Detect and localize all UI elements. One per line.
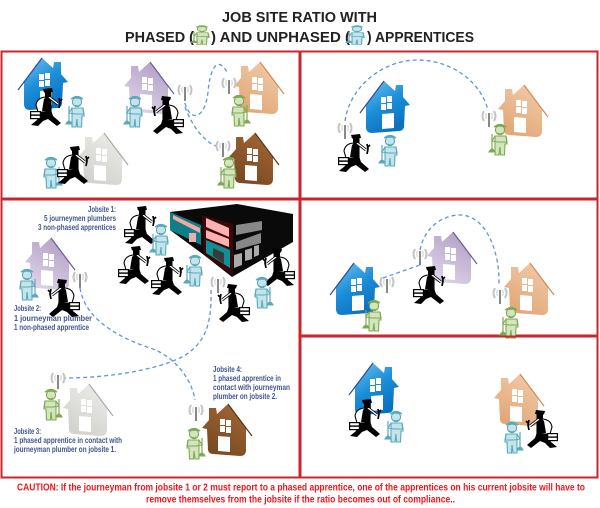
orange house [498, 85, 548, 137]
jobsite 4 label: Jobsite 4: [213, 365, 242, 374]
blue house with journeyman and apprentice [18, 58, 84, 127]
title: JOB SITE RATIO WITH [222, 10, 377, 26]
wireless links [380, 215, 506, 304]
title: PHASED ( [125, 30, 194, 46]
title: ) AND UNPHASED ( [211, 30, 350, 46]
jobsite 2 house and workers [20, 238, 79, 317]
panel: bottom right scenario [300, 336, 598, 478]
wireless links [178, 64, 236, 157]
blue house with journeyman and apprentice [349, 363, 403, 442]
orange house with journeyman and apprentice [494, 374, 557, 453]
wireless link [338, 60, 496, 139]
jobsite 4 label: 1 phased apprentice in [213, 374, 281, 383]
gray house with journeyman and apprentice [44, 133, 128, 188]
title [125, 10, 474, 46]
jobsite 1 label: Jobsite 1: [88, 205, 116, 214]
wireless links [52, 272, 224, 421]
jobsite 4 label: contact with journeyman [213, 383, 290, 392]
purple house with journeyman [414, 232, 477, 304]
jobsite 1 label: 3 non-phased apprentices [38, 223, 116, 232]
jobsite 1 workers [119, 206, 294, 322]
jobsite 3 label: journeyman plumber on jobsite 1. [13, 445, 116, 454]
purple house with journeyman and apprentice [124, 62, 183, 134]
jobsite 3 label: Jobsite 3: [14, 427, 41, 436]
orange house with phased apprentice [500, 263, 554, 338]
blue house with phased apprentice [330, 263, 381, 331]
orange house with phased apprentice [232, 62, 284, 126]
jobsite 4 label: plumber on jobsite 2. [213, 392, 277, 401]
panel: large left scenario [2, 200, 300, 478]
jobsite 1 label: 5 journeymen plumbers [44, 214, 116, 223]
jobsite 4 house and apprentice [187, 404, 252, 459]
panel: top left scenario [2, 52, 300, 198]
jobsite 3 label: 1 phased apprentice in contact with [14, 436, 122, 445]
jobsite 2 label: Jobsite 2: [14, 304, 41, 313]
commercial building [170, 204, 293, 277]
brown house with phased apprentice [218, 133, 279, 188]
jobsite 3 house and apprentice [44, 384, 113, 436]
non-phased apprentice [379, 136, 397, 166]
panel: middle right scenario [300, 200, 598, 338]
panel: top right scenario [300, 52, 598, 198]
blue house [360, 81, 410, 133]
caution note: remove themselves from the jobsite if the ratio becomes out of compliance.. [146, 494, 455, 506]
phased apprentice [489, 124, 507, 155]
title: ) APPRENTICES [367, 30, 474, 46]
journeyman [339, 134, 370, 172]
jobsite 2 label: 1 journeyman plumber [14, 314, 92, 323]
jobsite 2 label: 1 non-phased apprentice [14, 323, 89, 332]
